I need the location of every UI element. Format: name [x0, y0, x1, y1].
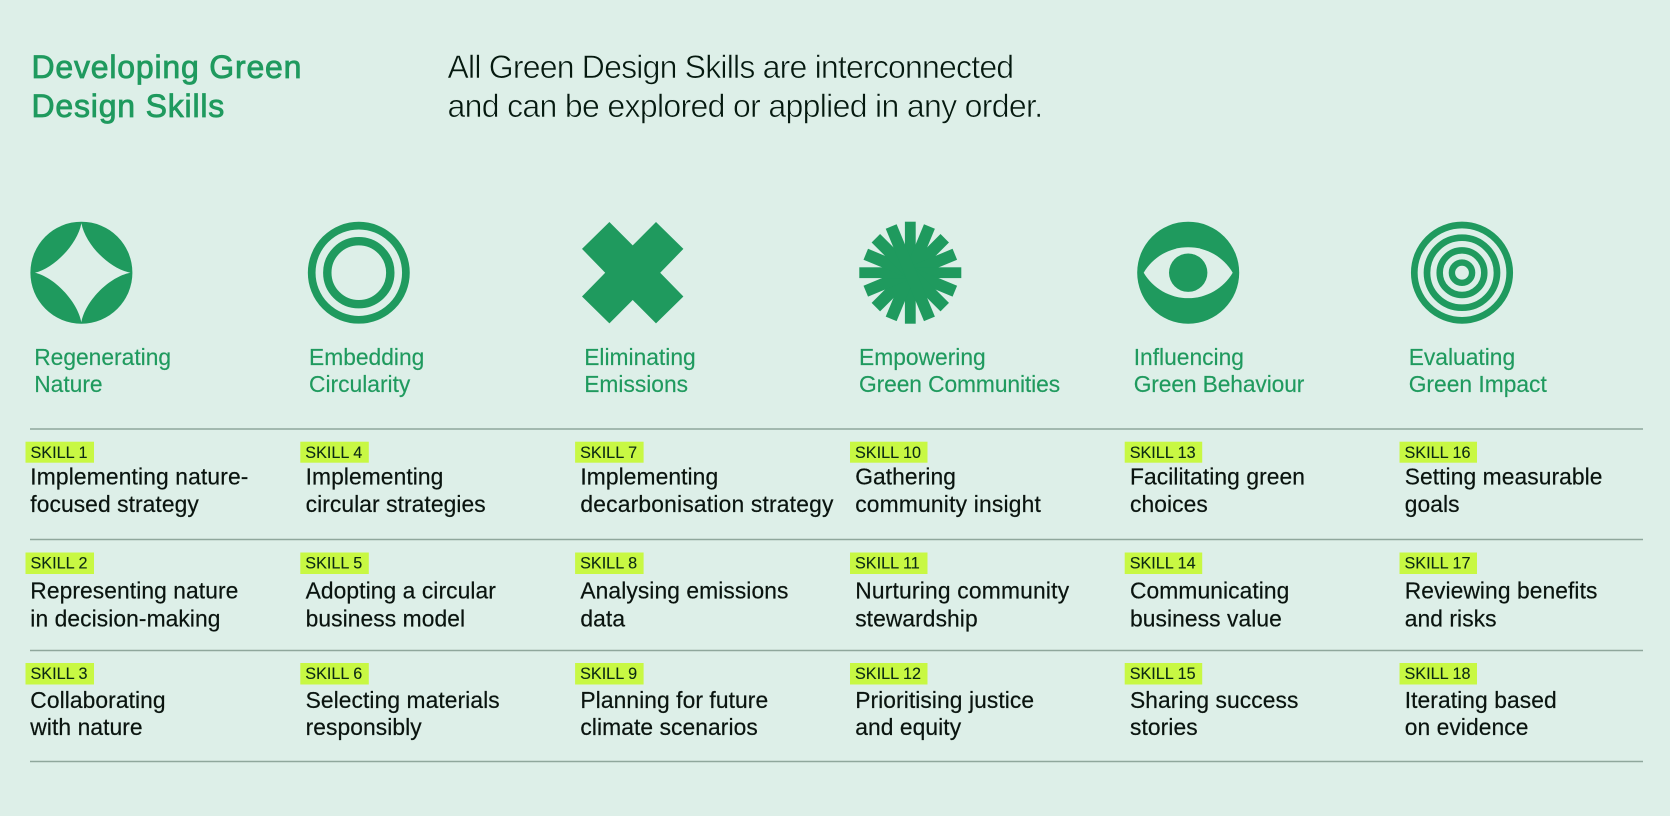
icon: sunburst — [859, 222, 961, 324]
skill 1: SKILL 1 — [30, 444, 88, 462]
skill 17: Reviewing benefits — [1405, 578, 1597, 604]
skill 2 — [26, 552, 238, 632]
skill 1: Implementing nature- — [30, 463, 249, 489]
subtitle — [448, 49, 1042, 124]
skill 4: circular strategies — [306, 491, 486, 517]
skill 16 — [1400, 442, 1603, 517]
skill 2: SKILL 2 — [30, 555, 88, 573]
skill 4 — [300, 442, 486, 517]
skill 6: SKILL 6 — [305, 665, 362, 683]
title: Design Skills — [32, 88, 225, 124]
category: Empowering Green Communities: Empowering — [859, 344, 986, 370]
category: Eliminating Emissions: Eliminating — [584, 344, 696, 370]
category: Regenerating Nature: Regenerating — [34, 344, 171, 370]
skill 7: Implementing — [580, 463, 718, 489]
skill 11: Nurturing community — [855, 578, 1070, 604]
skill 16: Setting measurable — [1405, 463, 1603, 489]
skill 8: Analysing emissions — [580, 578, 788, 604]
skill 17 — [1400, 552, 1597, 632]
skill 4: SKILL 4 — [305, 444, 362, 462]
skill 8: data — [580, 606, 625, 632]
skill 3: SKILL 3 — [30, 665, 88, 683]
skill 13 — [1125, 442, 1305, 517]
category: Regenerating Nature — [34, 344, 171, 397]
skill 7 — [575, 442, 834, 517]
category: Embedding Circularity: Embedding — [309, 344, 424, 370]
subtitle: and can be explored or applied in any order. — [448, 88, 1042, 124]
skill 2: Representing nature — [30, 578, 238, 604]
skill 6: Selecting materials — [306, 687, 500, 713]
category: Eliminating Emissions — [584, 344, 696, 397]
skill 18: Iterating based — [1405, 687, 1557, 713]
category: Embedding Circularity — [309, 344, 424, 397]
category: Evaluating Green Impact: Green Impact — [1409, 371, 1547, 397]
skill 18 — [1400, 663, 1557, 740]
skill 14: SKILL 14 — [1130, 555, 1196, 573]
skill 8 — [575, 552, 788, 632]
skill 11: SKILL 11 — [855, 555, 920, 573]
skill 9: climate scenarios — [580, 714, 758, 740]
category: Influencing Green Behaviour — [1134, 344, 1305, 397]
category: Influencing Green Behaviour: Influencing — [1134, 344, 1244, 370]
skill 10: Gathering — [855, 463, 956, 489]
skill 12: Prioritising justice — [855, 687, 1034, 713]
skill 13: SKILL 13 — [1130, 444, 1196, 462]
skill 14: business value — [1130, 606, 1282, 632]
skill 1 — [26, 442, 249, 517]
icon: four-point star in circle — [30, 222, 132, 324]
title — [32, 49, 302, 124]
icon: target rings — [1414, 225, 1510, 320]
skill 6: responsibly — [306, 714, 422, 740]
skill 16: SKILL 16 — [1404, 444, 1470, 462]
skill 5 — [300, 552, 496, 632]
skill 15 — [1125, 663, 1298, 740]
skill 15: SKILL 15 — [1130, 665, 1196, 683]
category: Empowering Green Communities: Green Communities — [859, 371, 1060, 397]
skill 8: SKILL 8 — [580, 555, 637, 573]
category: Empowering Green Communities — [859, 344, 1060, 397]
skill 14 — [1125, 552, 1289, 632]
skill 9: SKILL 9 — [580, 665, 637, 683]
skill 12: SKILL 12 — [855, 665, 921, 683]
skill 18: on evidence — [1405, 714, 1529, 740]
skill 2: in decision-making — [30, 606, 221, 632]
category: Evaluating Green Impact: Evaluating — [1409, 344, 1515, 370]
skill 13: Facilitating green — [1130, 463, 1305, 489]
skill 15: Sharing success — [1130, 687, 1298, 713]
skill 7: decarbonisation strategy — [580, 491, 834, 517]
icon: eye — [1137, 222, 1239, 324]
skill 5: business model — [306, 606, 465, 632]
title: Developing Green — [32, 49, 302, 85]
skill 14: Communicating — [1130, 578, 1289, 604]
skill 3: Collaborating — [30, 687, 166, 713]
skill 11 — [850, 552, 1070, 632]
category: Influencing Green Behaviour: Green Behaviour — [1134, 371, 1305, 397]
skill 10 — [850, 442, 1042, 517]
icon: cross — [582, 222, 683, 323]
skill 1: focused strategy — [30, 491, 199, 517]
skill 17: and risks — [1405, 606, 1497, 632]
skill 6 — [300, 663, 500, 740]
skill 3: with nature — [29, 714, 143, 740]
skill 12 — [850, 663, 1034, 740]
skill 9 — [575, 663, 768, 740]
subtitle: All Green Design Skills are interconnected — [448, 49, 1013, 85]
skill 11: stewardship — [855, 606, 978, 632]
icon: double ring — [312, 226, 406, 320]
category: Regenerating Nature: Nature — [34, 371, 103, 397]
skill 12: and equity — [855, 714, 962, 740]
skill 13: choices — [1130, 491, 1208, 517]
category: Embedding Circularity: Circularity — [309, 371, 411, 397]
skill 4: Implementing — [306, 463, 443, 489]
skill 7: SKILL 7 — [580, 444, 637, 462]
skill 18: SKILL 18 — [1404, 665, 1470, 683]
skill 10: community insight — [855, 491, 1042, 517]
skill 5: SKILL 5 — [305, 555, 362, 573]
skill 10: SKILL 10 — [855, 444, 921, 462]
category: Evaluating Green Impact — [1409, 344, 1547, 397]
skill 16: goals — [1405, 491, 1460, 517]
skill 3 — [26, 663, 166, 740]
skill 15: stories — [1130, 714, 1198, 740]
skill 17: SKILL 17 — [1404, 555, 1470, 573]
category: Eliminating Emissions: Emissions — [584, 371, 688, 397]
skill 9: Planning for future — [580, 687, 768, 713]
skill 5: Adopting a circular — [306, 578, 496, 604]
